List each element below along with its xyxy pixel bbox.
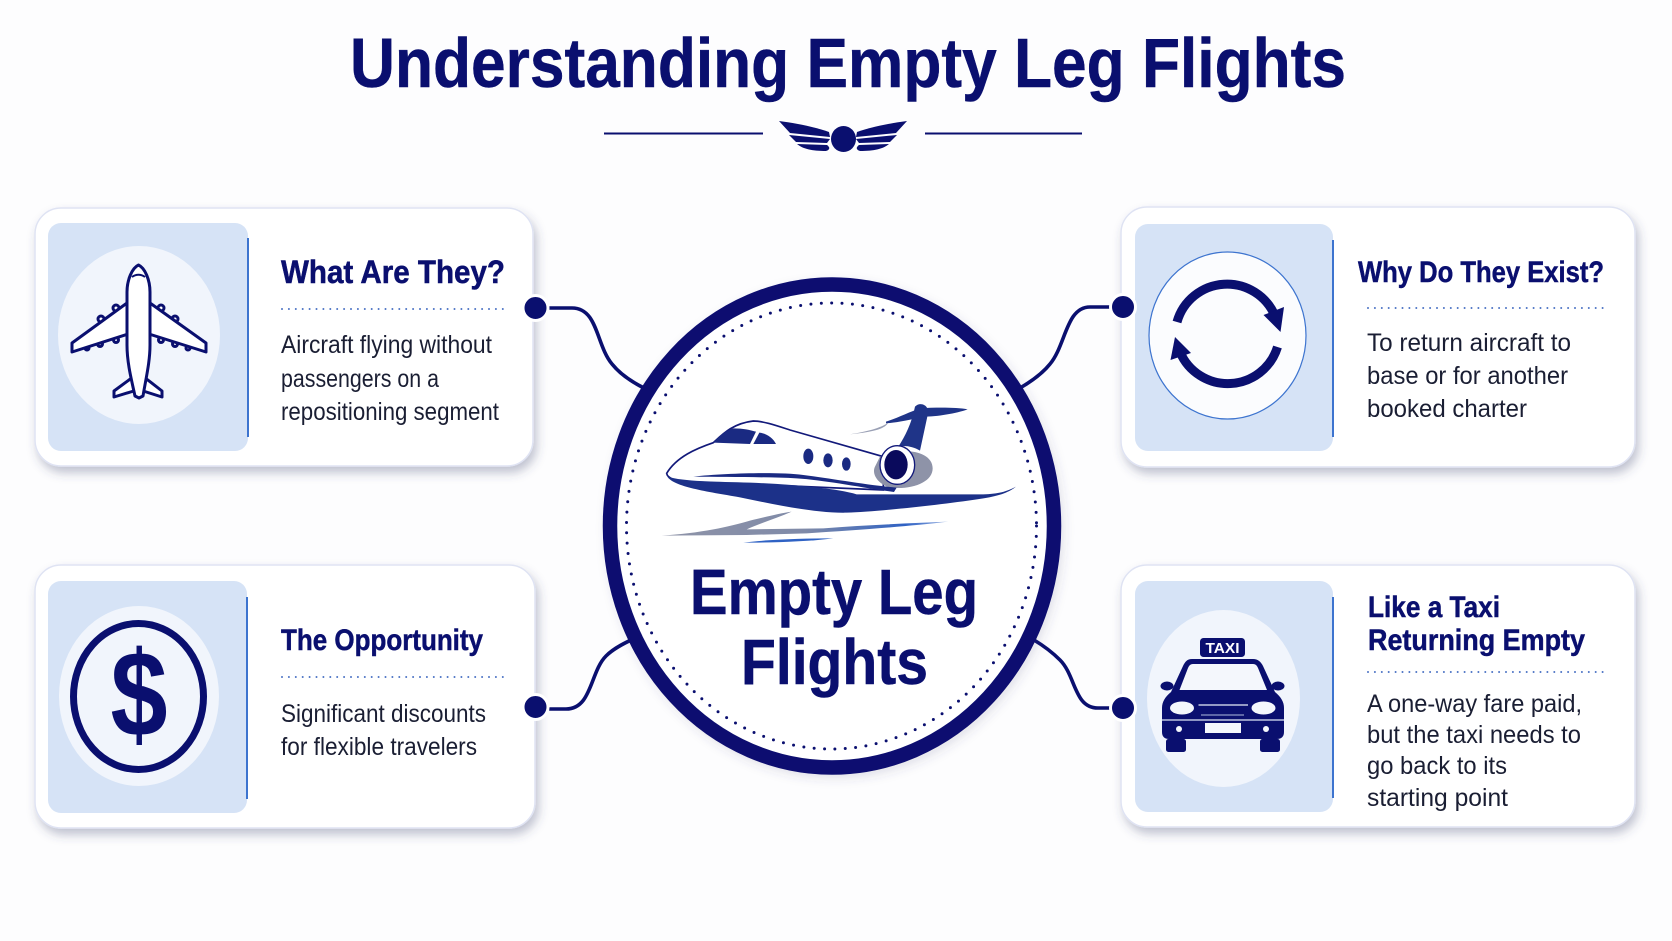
text: the opportunity (281, 700, 486, 761)
icon: dollar coin (74, 624, 204, 770)
heading: the opportunity: The Opportunity (281, 624, 483, 657)
panel: what are they (35, 208, 533, 466)
icon: private jet (662, 404, 1016, 543)
center label: Flights (741, 626, 928, 698)
icon: taxi: TAXI (1206, 641, 1240, 657)
connector node: bottom right (1110, 696, 1136, 720)
text: what are they: passengers on a (281, 365, 439, 393)
text: like a taxi: go back to its (1367, 752, 1507, 780)
center label (690, 556, 978, 698)
icon: airplane top view (72, 265, 206, 398)
panel: like a taxi (1121, 565, 1635, 827)
text: the opportunity: Significant discounts (281, 700, 486, 728)
text: like a taxi: A one-way fare paid, (1367, 690, 1582, 718)
heading: why do they exist: Why Do They Exist? (1358, 256, 1604, 289)
connector: bottom left (550, 636, 640, 709)
text: what are they (281, 331, 499, 426)
connector node: top right (1110, 294, 1136, 320)
center circle badge (610, 284, 1054, 768)
icon: taxi (1160, 638, 1284, 752)
center label: Empty Leg (690, 556, 978, 628)
icon: circular arrows (1170, 284, 1284, 384)
text: why do they exist: base or for another (1367, 362, 1568, 390)
heading: like a taxi: Returning Empty (1368, 624, 1585, 657)
text: what are they: repositioning segment (281, 398, 499, 426)
text: why do they exist: booked charter (1367, 395, 1527, 423)
text: what are they: Aircraft flying without (281, 331, 492, 359)
connector: top left (550, 308, 644, 388)
connector: top right (1020, 307, 1109, 388)
panel: why do they exist (1121, 207, 1635, 467)
text: why do they exist: To return aircraft to (1367, 329, 1571, 357)
text: like a taxi: but the taxi needs to (1367, 721, 1581, 749)
connector node: bottom left (523, 694, 548, 720)
connector: bottom right (1034, 640, 1109, 708)
text: the opportunity: for flexible travelers (281, 733, 477, 761)
text: why do they exist (1367, 329, 1571, 423)
title: Understanding Empty Leg Flights (350, 24, 1346, 102)
icon: dollar coin: $ (111, 626, 167, 762)
title divider with wings emblem (604, 121, 1082, 152)
text: like a taxi: starting point (1367, 784, 1508, 812)
heading: like a taxi (1368, 591, 1585, 657)
heading: like a taxi: Like a Taxi (1368, 591, 1500, 624)
text: like a taxi (1367, 690, 1582, 812)
heading: what are they: What Are They? (281, 254, 505, 290)
panel: the opportunity (35, 565, 535, 828)
connector node: top left (523, 296, 548, 320)
